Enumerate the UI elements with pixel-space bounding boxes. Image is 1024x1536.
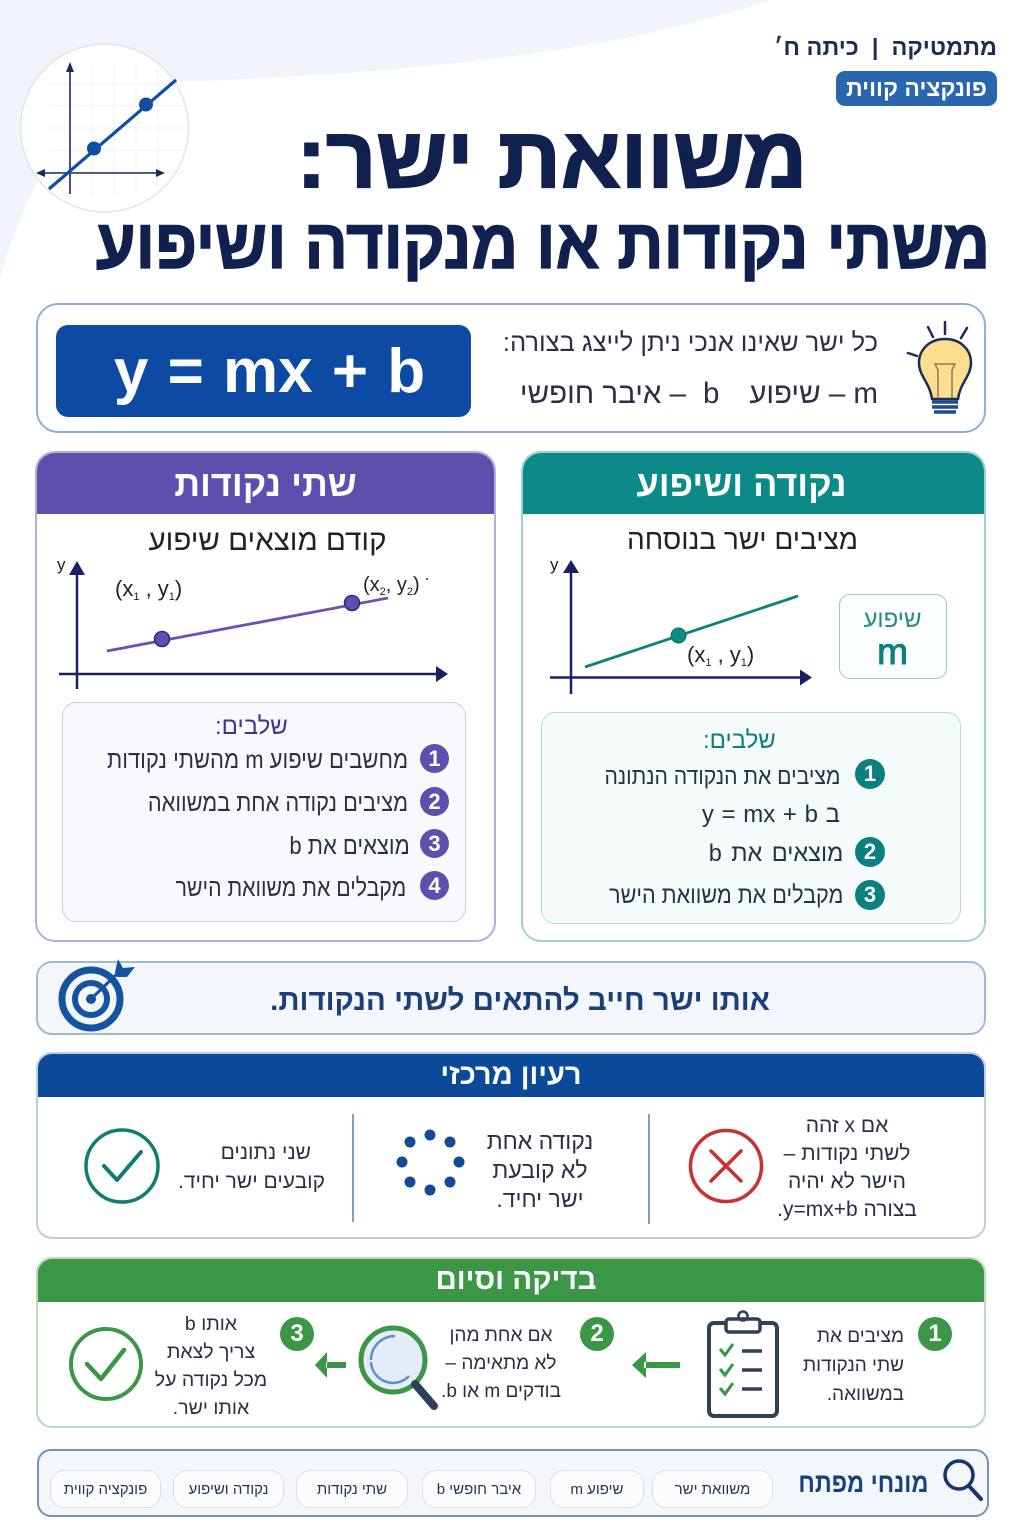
check step 1 number: [918, 1317, 952, 1351]
callout: [36, 961, 986, 1035]
two points header: שתי נקודות: [174, 463, 357, 504]
check header: [37, 1258, 985, 1302]
formula legend text: m – שיפוע: [749, 377, 878, 410]
central idea header: רעיון מרכזי: [440, 1059, 582, 1091]
subject line: מתמטיקה | כיתה ח׳: [774, 34, 997, 60]
no-slope text: בצורה y=mx+b.: [777, 1198, 917, 1221]
check step 3 number: [280, 1317, 314, 1351]
two points graph: 2: [407, 586, 413, 598]
step 2: 2: [428, 789, 441, 814]
check step 1 text: מציבים את: [817, 1326, 904, 1347]
chip 4: [296, 1470, 408, 1508]
one point text: לא קובעת: [492, 1157, 588, 1183]
icon: dotted circle: [396, 1130, 464, 1196]
check step 3 text: מכל נקודה על: [155, 1369, 267, 1391]
arrow: [315, 1352, 346, 1378]
chip 2: שיפוע m: [570, 1481, 624, 1498]
slope symbol: m: [877, 631, 908, 672]
check step 1 number: 1: [928, 1320, 942, 1347]
two points steps box: [62, 702, 466, 922]
panel: point and slope: [521, 451, 986, 942]
two points graph: ): [175, 576, 182, 601]
panel: central idea: [36, 1052, 986, 1239]
subtitle: משתי נקודות או מנקודה ושיפוע: [96, 205, 990, 283]
icon: clipboard: [707, 1310, 779, 1418]
two points graph: (x: [115, 576, 133, 601]
chip 5: [173, 1470, 284, 1508]
text: מקבלים את משוואת הישר: [609, 882, 843, 909]
icon: line graph badge: [20, 44, 190, 213]
text: מוצאים את b: [290, 832, 410, 860]
formula legend text: – איבר חופשי: [520, 377, 686, 410]
icon: target: [58, 959, 135, 1032]
step 3: 3: [428, 831, 441, 856]
text: מקבלים את משוואת הישר: [175, 874, 406, 902]
no-slope text: אם x זהה: [806, 1114, 888, 1137]
step 3: [855, 880, 885, 910]
step 1: 1: [864, 761, 876, 786]
step 2: [420, 787, 449, 816]
icon: red x: [688, 1128, 764, 1204]
step 2: [855, 837, 885, 867]
check step 3 text: [155, 1313, 267, 1419]
formula legend text: b: [703, 377, 719, 410]
point and slope graph: 1: [705, 657, 711, 669]
check step 2 text: אם אחת מהן: [450, 1325, 552, 1346]
text: מוצאים את b: [708, 840, 843, 867]
icon: magnifier: [358, 1326, 438, 1410]
point and slope header: נקודה ושיפוע: [636, 463, 846, 504]
two points graph: ): [413, 574, 420, 596]
two points graph: (x: [363, 574, 380, 596]
chip 2: [550, 1470, 644, 1508]
check step 1 text: במשוואה.: [827, 1384, 904, 1405]
two givens text: שני נתונים: [221, 1141, 311, 1164]
formula legend text: [520, 377, 878, 410]
key terms heading: מונחי מפתח: [798, 1468, 928, 1498]
two points graph: , y: [386, 574, 407, 596]
check step 1 text: [803, 1326, 904, 1405]
chip 4: שתי נקודות: [317, 1481, 387, 1498]
text: מציבים את הנקודה הנתונה: [604, 763, 840, 789]
check step 2 number: 2: [590, 1320, 604, 1347]
panel: check and finish: [36, 1257, 986, 1428]
step 2: 2: [864, 839, 876, 864]
text: מציבים נקודה אחת במשוואה: [148, 789, 408, 817]
check step 2 text: בודקים m או b.: [441, 1381, 561, 1402]
check step 2 text: [441, 1325, 561, 1402]
topic tag: [836, 71, 997, 106]
check header: בדיקה וסיום: [436, 1263, 596, 1296]
step 1 formula: ב y = mx + b: [702, 801, 840, 828]
check step 3 text: אותו b: [185, 1313, 237, 1335]
two givens text: קובעים ישר יחיד.: [178, 1170, 325, 1193]
panel: formula: [36, 303, 986, 433]
step 4: 4: [428, 873, 441, 898]
point and slope header: [522, 452, 985, 514]
two points graph: y: [57, 555, 66, 574]
two points graph: 2: [380, 586, 386, 598]
panel: two points: [35, 451, 496, 942]
two points subheading: קודם מוצאים שיפוע: [148, 524, 386, 557]
text: מחשבים שיפוע m מהשתי נקודות: [107, 746, 408, 774]
formula intro text: כל ישר שאינו אנכי ניתן לייצג בצורה:: [503, 329, 878, 357]
formula box: y = mx + b: [114, 337, 425, 406]
no-slope text: [777, 1114, 917, 1221]
check step 3 text: צריך לצאת: [167, 1341, 255, 1363]
point and slope graph: y: [550, 555, 559, 574]
point and slope steps heading: שלבים:: [703, 727, 776, 754]
chip 1: [652, 1470, 773, 1508]
two givens text: [178, 1141, 325, 1193]
chip 5: נקודה ושיפוע: [188, 1481, 269, 1498]
point and slope steps box: [541, 712, 961, 924]
check step 3 number: 3: [290, 1320, 304, 1347]
chip 6: פונקציה קווית: [64, 1481, 147, 1498]
chip 3: [422, 1470, 536, 1508]
two points steps heading: שלבים:: [215, 713, 288, 740]
check step 3 text: אותו ישר.: [173, 1397, 249, 1419]
two points header: [36, 452, 495, 514]
check step 2 number: [580, 1317, 614, 1351]
one point text: [487, 1128, 593, 1212]
check step 1 text: שתי הנקודות: [803, 1355, 904, 1376]
point and slope graph: [550, 555, 812, 694]
icon: green check: [69, 1327, 143, 1401]
icon: light bulb: [906, 320, 972, 414]
no-slope text: לשתי נקודות –: [784, 1142, 910, 1165]
topic tag: פונקציה קווית: [846, 75, 987, 101]
central idea header: [37, 1053, 985, 1097]
point and slope subheading: מציבים ישר בנוסחה: [627, 524, 858, 555]
arrow: [632, 1352, 680, 1378]
point and slope graph: ): [747, 642, 754, 667]
slope card: [839, 594, 947, 679]
check step 2 text: לא מתאימה –: [446, 1353, 556, 1374]
icon: search: [943, 1459, 984, 1502]
step 3: 3: [864, 882, 876, 907]
icon: teal check: [84, 1128, 160, 1204]
two points graph: [57, 555, 448, 689]
two points graph: , y: [139, 576, 169, 601]
one point text: ישר יחיד.: [496, 1186, 584, 1212]
background wave: [0, 0, 769, 279]
point and slope graph: , y: [711, 642, 741, 667]
two points graph: 1: [169, 591, 175, 603]
step 1: [420, 744, 449, 773]
no-slope text: הישר לא יהיה: [788, 1170, 906, 1193]
chip 3: איבר חופשי b: [437, 1481, 521, 1498]
point and slope graph: (x: [687, 642, 705, 667]
slope label: שיפוע: [863, 606, 922, 633]
callout text: אותו ישר חייב להתאים לשתי הנקודות.: [270, 984, 770, 1017]
step 1: [855, 759, 885, 789]
step 4: [420, 871, 449, 900]
chip 6: [50, 1470, 161, 1508]
step 3: [420, 829, 449, 858]
panel: key terms: [37, 1449, 989, 1517]
title: משוואת ישר:: [297, 110, 807, 206]
point and slope graph: 1: [741, 657, 747, 669]
two points graph: 1: [133, 591, 139, 603]
chip 1: משוואת ישר: [675, 1481, 750, 1498]
step 1: 1: [428, 746, 441, 771]
formula box: [56, 325, 471, 417]
one point text: נקודה אחת: [487, 1128, 593, 1154]
